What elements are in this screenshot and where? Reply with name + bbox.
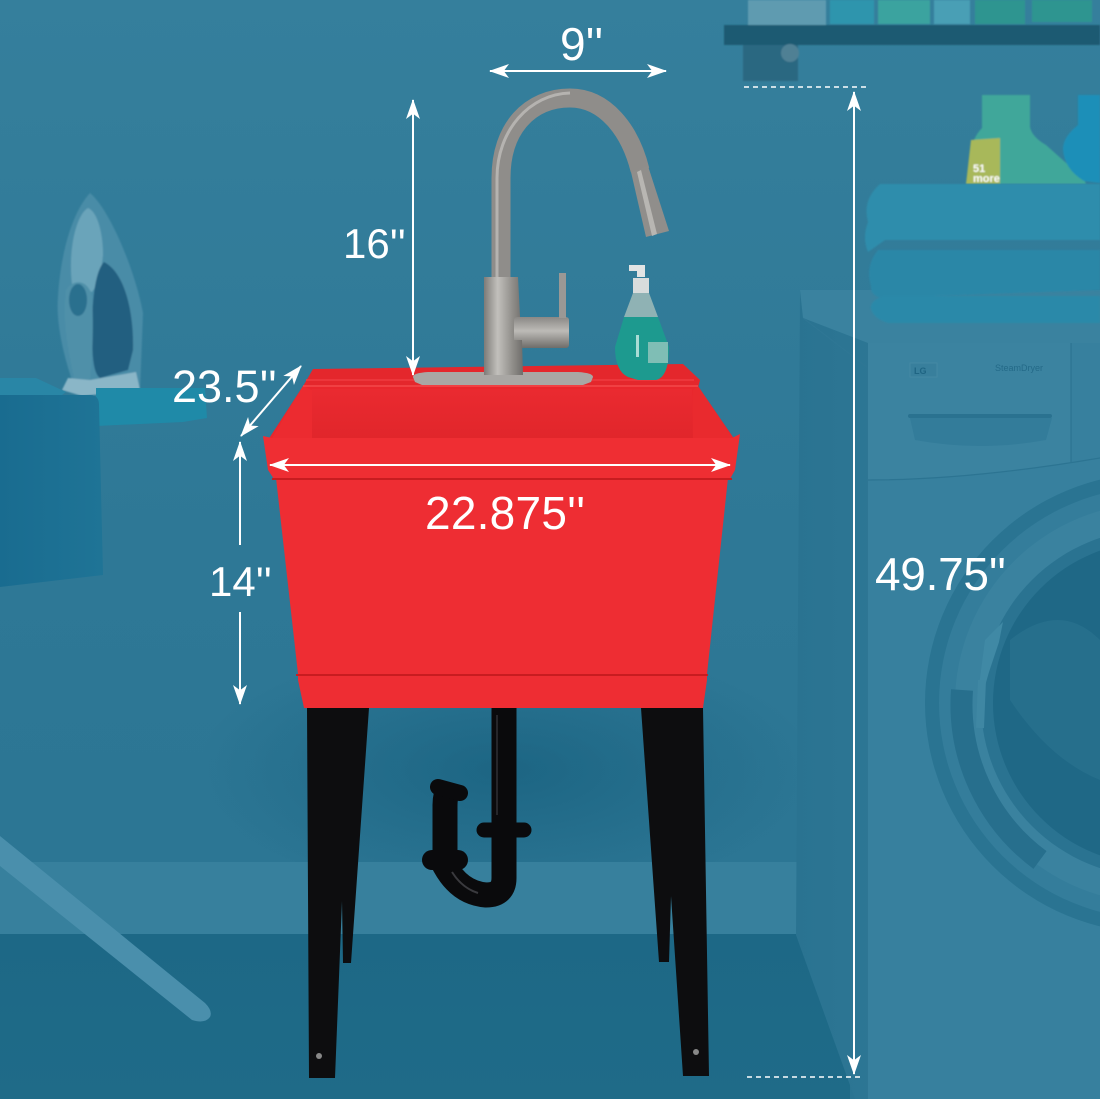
dimension: 22.875 inch width: 22.875'' [425, 487, 585, 539]
dimension: 16 inch height: 16'' [343, 220, 406, 267]
front rim [263, 434, 740, 479]
faucet deck plate [413, 372, 593, 385]
dimension: 9 inch width: 9'' [560, 18, 603, 70]
detergent bottles: more [973, 173, 1000, 185]
iron [58, 193, 143, 396]
dimension: 23.5 inch depth [172, 361, 301, 436]
washer door [925, 473, 1100, 933]
drain pipe [432, 708, 524, 895]
soap dispenser [615, 265, 669, 380]
dimension: 49.75 inch height [744, 87, 1006, 1077]
dimension: 14 inch height: 14'' [209, 558, 272, 605]
washing machine: LG [914, 366, 926, 376]
sink legs [307, 708, 709, 1078]
washer side and top [796, 290, 1100, 1099]
folded towels [865, 184, 1100, 323]
washing machine: SteamDryer [995, 363, 1043, 373]
dimension: 49.75 inch height: 49.75'' [875, 548, 1006, 600]
faucet base collar [484, 340, 523, 375]
sink shadow on wall [195, 640, 815, 900]
washing machine [796, 290, 1100, 1099]
baseboard [0, 862, 800, 934]
ironing board [0, 378, 211, 1021]
washer control panel [868, 343, 1071, 480]
back deck [302, 364, 700, 388]
red sink tub [263, 364, 740, 708]
tub body [276, 478, 728, 708]
shelf with bottles [724, 0, 1100, 81]
floor [0, 934, 850, 1099]
faucet [484, 93, 669, 375]
detergent bottles: 51 [973, 163, 985, 175]
dimension: 23.5 inch depth: 23.5'' [172, 361, 277, 412]
inner basin [268, 386, 735, 440]
detergent bottles [966, 95, 1100, 185]
